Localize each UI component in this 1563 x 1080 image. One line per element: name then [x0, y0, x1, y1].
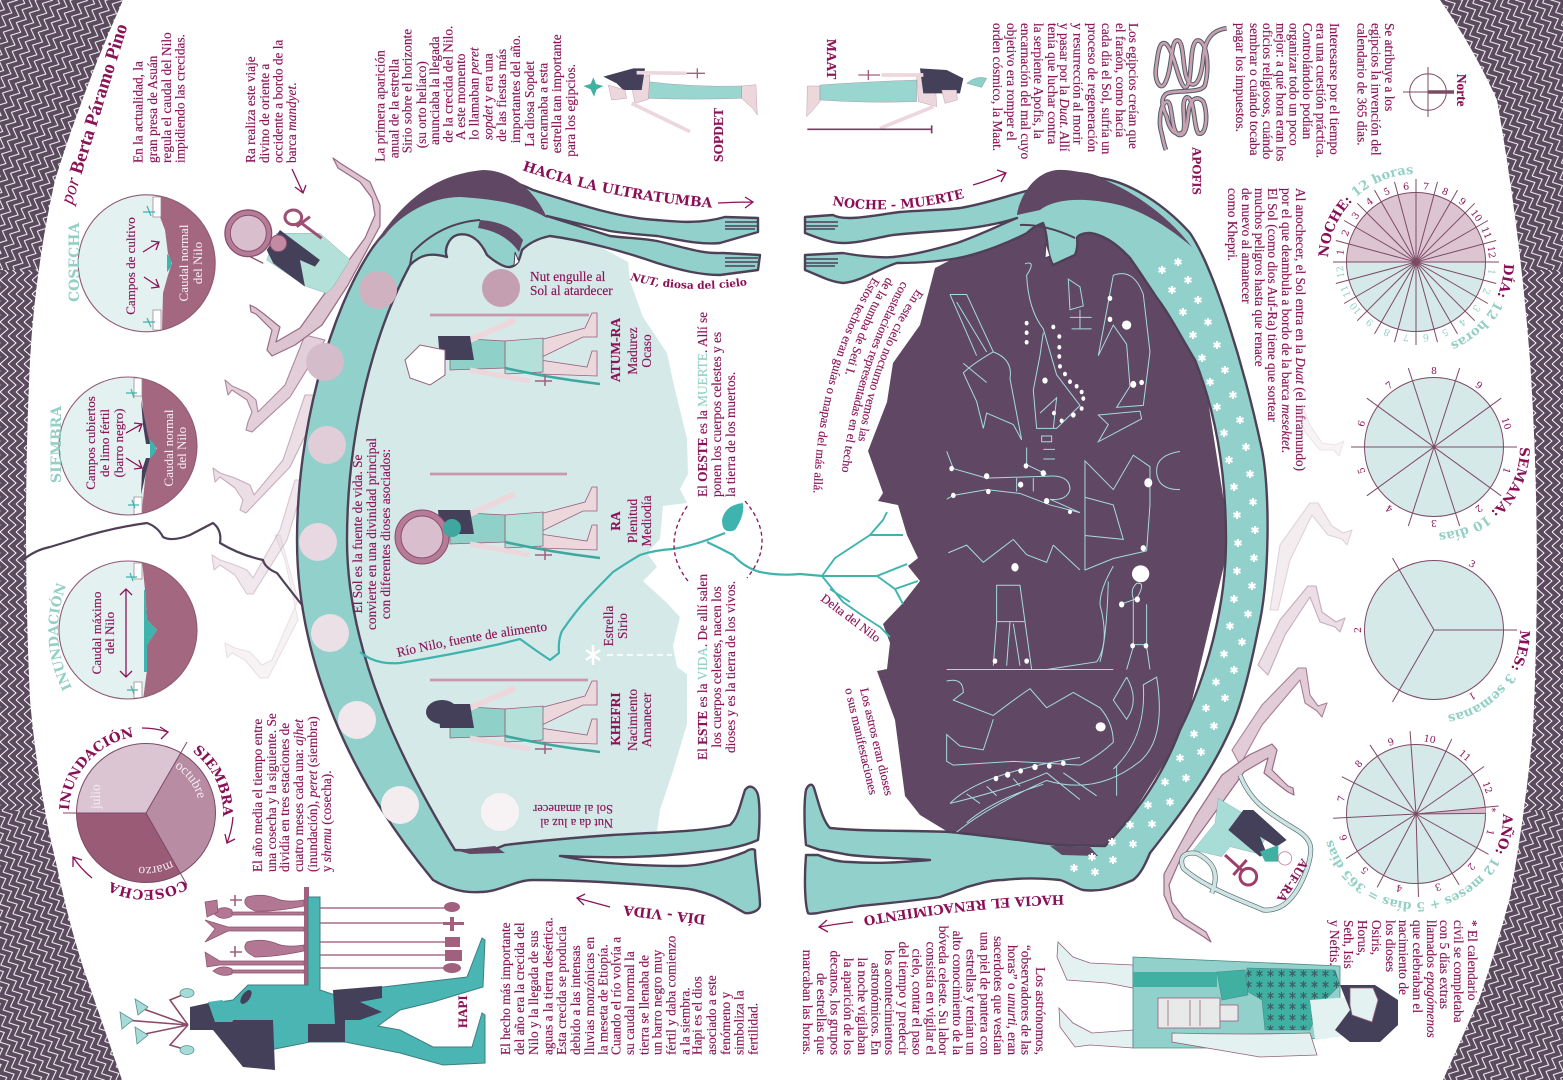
- chart: clock mes: MES: 3 semanas: [1448, 630, 1530, 722]
- chart: clock noche y día: 2: [1480, 286, 1492, 296]
- text: El Sol fuente de vida: El Sol es la fuente de vida. Se: [350, 455, 365, 613]
- label: Estrella Sirio: Sirio: [615, 613, 630, 639]
- line: horizon river: [23, 523, 302, 605]
- chart: clock noche y día: 5: [1382, 186, 1392, 198]
- text: estrella Sirio: (su orto helíaco): [414, 61, 429, 148]
- chart: clock noche y día: 1: [1335, 248, 1347, 256]
- chart: clock año: *: [1486, 807, 1497, 813]
- figure: Auf-Ra on the barque: [1182, 775, 1311, 910]
- chart: clock año: 1: [1483, 828, 1495, 837]
- text: invención del calendario: calendario de 365 días.: [1354, 23, 1370, 146]
- labels: gods: Ocaso: [639, 334, 654, 368]
- text: cielo nocturno: de la tumba de Seti I.: [845, 278, 893, 374]
- chart: clock noche y día: 6: [1422, 331, 1430, 343]
- text: cielo nocturno: Estos techos eran guías o mapas del más allá.: [813, 277, 880, 492]
- byline: por Berta Páramo Pino: [64, 25, 127, 208]
- text: astrónomos: sacerdotes que vestían: [991, 936, 1006, 1055]
- boats: right solar barques: [1164, 405, 1352, 942]
- figure: reclining woman: [1057, 942, 1398, 1057]
- labels: gods: ATUM-RA: [608, 318, 623, 382]
- chart: clock semana: 6: [1356, 419, 1368, 428]
- text: astrónomos: de estrellas que: [814, 973, 829, 1055]
- left text: Asuán: gran presa de Asuán: [145, 55, 160, 163]
- text: año y cosecha: cuatro meses cada una: ajhet: [291, 719, 306, 872]
- text: epagómenos: llamados epagómenos: [1424, 920, 1439, 1038]
- text: astrónomos: la aparición de los: [841, 958, 856, 1055]
- figure: Nut left (day): [297, 170, 760, 913]
- chart: clock año: 9: [1387, 737, 1396, 749]
- chart: clock noche y día: 9: [1364, 316, 1376, 328]
- arrows: dashed west and east: [674, 501, 762, 581]
- text: crecida: Cuando el río volvía a: [609, 937, 624, 1055]
- text: epagómenos: los dioses: [1383, 920, 1398, 972]
- text: crecida: del año era la crecida del: [512, 922, 527, 1055]
- chart: clock noche y día: 3: [1350, 210, 1362, 222]
- label: Nut da a luz: Nut da a luz al: [540, 816, 613, 830]
- text: interés práctico: pagar los impuestos.: [1233, 23, 1248, 132]
- text: OESTE: la tierra de los muertos.: [723, 372, 738, 497]
- panel: cosecha circle: Caudal normal: [176, 224, 191, 301]
- text: Ra mandyet: occidente a bordo de la: [270, 40, 286, 163]
- text: OESTE: ponen los cuerpos celestes y es: [709, 332, 724, 497]
- label: Nut da a luz: Sol al amanecer: [532, 802, 613, 816]
- figure: Atum-Ra: [405, 313, 600, 386]
- text: estrella Sirio: para los egipcios.: [563, 64, 578, 157]
- text: Los egipcios creían: la serpiente Apofis, la: [1031, 23, 1046, 139]
- panel: cosecha circle: Campos de cultivo: [123, 217, 138, 315]
- text: crecida: Nilo y la llegada de sus: [526, 931, 541, 1055]
- text: Los astros eran dioses: Los astros eran dioses: [860, 687, 891, 796]
- chart: clock noche y día: DÍA: 12 horas: [1451, 264, 1515, 349]
- chart: clock noche y día: 11: [1478, 225, 1493, 241]
- label: cosecha teal: COSECHA: [67, 222, 83, 302]
- text: El Sol fuente de vida: convierte en una divinidad principal: [364, 438, 379, 630]
- panel: siembra circle: de limo fértil: [97, 409, 112, 477]
- chart: clock noche y día: 12: [1335, 265, 1347, 279]
- panel: siembra circle: (barro negro): [111, 409, 126, 477]
- text: crecida: su caudal normal la: [622, 951, 637, 1055]
- chart: clock noche y día: 4: [1456, 316, 1468, 328]
- text: ESTE: los cuerpos celestes, nacen los: [709, 586, 724, 748]
- text: interés práctico: era una cuestión práctica.: [1314, 23, 1328, 158]
- text: epagómenos: civil se completaba: [1451, 920, 1466, 1023]
- label: Sopdet: SOPDET: [711, 108, 726, 162]
- boats: left solar barques: [212, 158, 380, 678]
- text: anochecer: como Khepri.: [1225, 188, 1240, 261]
- text: crecida: fertilidad.: [745, 1003, 760, 1055]
- chart: clock año: 3: [1433, 880, 1442, 892]
- Nile river: [360, 512, 918, 663]
- text: Los astros eran dioses: o sus manifestaciones: [845, 688, 875, 795]
- chart: clock semana: 5: [1356, 466, 1368, 475]
- chart: clock noche y día: 3: [1470, 302, 1482, 314]
- chart: seasons pie: julio: [88, 784, 103, 810]
- panel: dark night sky: [868, 220, 1230, 850]
- label: Hapi: HAPI: [455, 996, 470, 1028]
- left text: Asuán: impidiendo las crecidas.: [172, 34, 188, 163]
- chart: clock noche y día: NOCHE: 12 horas: [1318, 167, 1413, 257]
- text: año y cosecha: y shemu (cosecha).: [319, 770, 334, 872]
- text: astrónomos: una piel de pantera con: [978, 932, 993, 1055]
- text: crecida: la meseta de Etiopía.: [595, 944, 610, 1055]
- text: epagómenos: Horus,: [1355, 920, 1370, 956]
- label: Río Nilo: Río Nilo, fuente de alimento: [396, 624, 547, 657]
- figure: Ra on the barque: [225, 210, 350, 293]
- chart: seasons pie: INUNDACIÓN: [59, 727, 132, 810]
- chart: clock noche y día: 11: [1339, 283, 1354, 299]
- panel: siembra circle: Campos cubiertos: [83, 396, 98, 490]
- text: astrónomos: “observadores de las: [1019, 945, 1034, 1055]
- text: Los egipcios creían: objetivo era romper el: [1004, 23, 1019, 141]
- text: año y cosecha: El año media el tiempo entre: [250, 719, 265, 872]
- text: anochecer: Al anochecer, el Sol entra en la Duat (el inframundo): [1293, 188, 1308, 471]
- chart: clock noche y día: 5: [1440, 326, 1450, 338]
- icon: Sirio star: [586, 645, 672, 665]
- text: Ra mandyet: barca mandyet.: [284, 83, 299, 163]
- label: Nut diosa del cielo: NUT, diosa del cielo: [630, 272, 746, 289]
- chart: clock noche y día: 9: [1456, 196, 1468, 208]
- text: astrónomos: decanos, los grupos: [828, 950, 843, 1055]
- Nile lake: [722, 503, 743, 531]
- chart: clock semana: 9: [1473, 380, 1484, 392]
- text: Los egipcios creían: el faraón, como hacía: [1113, 23, 1128, 138]
- text: El Sol fuente de vida: con diferentes dioses asociados:: [378, 449, 393, 619]
- chart: clock semana: 1: [1500, 466, 1512, 475]
- text: crecida: aguas a la tierra desértica.: [540, 917, 556, 1055]
- panel: light day land: [335, 222, 688, 860]
- panel: inundación circle: Caudal máximo: [89, 592, 104, 674]
- label: Auf-Ra: AUF-RA: [1274, 856, 1311, 904]
- label: Norte: Norte: [1454, 74, 1469, 107]
- text: invención del calendario: egipcios la invención del: [1368, 23, 1384, 156]
- text: interés práctico: Controlándolo podían: [1300, 23, 1315, 140]
- text: OESTE: El OESTE es la MUERTE. Allí se: [695, 312, 710, 497]
- chart: seasons pie: COSECHA: [110, 882, 187, 900]
- chart: clock noche y día: 12: [1485, 245, 1497, 259]
- figure: Maat: [807, 68, 987, 133]
- chart: clock mes: 2: [1353, 627, 1364, 633]
- chart: seasons pie: octubre: [176, 763, 204, 798]
- labels: gods: RA: [608, 511, 623, 531]
- chart: seasons pie: [59, 726, 236, 900]
- text: estrella Sirio: lo llamaban peret: [466, 47, 481, 140]
- labels: gods: Madurez: [625, 327, 640, 375]
- text: Los egipcios creían: cada día el Sol, sufría un: [1099, 23, 1114, 155]
- chart: clock noche y día: 7: [1422, 181, 1430, 193]
- text: epagómenos: * El calendario: [1465, 920, 1480, 1001]
- stars: night band: [1070, 258, 1258, 876]
- label: inundación teal: INUNDACIÓN: [48, 582, 72, 692]
- text: estrella Sirio: sopdet y era una: [481, 53, 496, 140]
- text: Los egipcios creían: encarnación del mal cuyo: [1018, 23, 1033, 160]
- label: Nut engulle: Sol al atardecer: [530, 283, 613, 298]
- text: astrónomos: alto conocimiento de la: [950, 931, 965, 1055]
- text: Ra mandyet: divino de oriente a: [257, 64, 272, 163]
- text: crecida: un barro negro muy: [650, 949, 665, 1055]
- text: Los egipcios creían: y resurrección al morir: [1070, 23, 1086, 145]
- text: estrella Sirio: estrella tan importante: [549, 34, 564, 153]
- heading: noche muerte: NOCHE - MUERTE: [832, 188, 964, 210]
- text: cielo nocturno: [813, 277, 924, 492]
- chart: clock noche y día: 10: [1348, 300, 1364, 316]
- text: astrónomos: marcaban las horas.: [800, 950, 815, 1055]
- text: interés práctico: organizar todo un poco: [1286, 23, 1302, 146]
- text: interés práctico: mejor: a qué hora eran los: [1274, 23, 1288, 161]
- text: epagómenos: nacimiento de: [1396, 920, 1411, 995]
- chart: clock año: 4: [1395, 882, 1403, 894]
- text: epagómenos: Seth, Isis: [1341, 920, 1356, 969]
- text: astrónomos: Los astrónomos,: [1033, 967, 1048, 1055]
- text: Los egipcios creían: Los egipcios creían que: [1126, 23, 1141, 149]
- labels: gods: KHEFRI: [608, 692, 623, 746]
- chart: clock noche y día: 8: [1440, 186, 1450, 198]
- left text: Asuán: En la actualidad, la: [130, 61, 146, 163]
- text: epagómenos: con 5 días extras: [1437, 920, 1452, 1009]
- chart: clock noche y día: [1318, 167, 1515, 349]
- text: crecida: Hapi es el dios: [690, 976, 705, 1055]
- chart: clock año: 11: [1456, 748, 1473, 764]
- text: anochecer: muchos peligros hasta que renace: [1252, 188, 1267, 367]
- chart: clock semana: 2: [1473, 502, 1484, 514]
- label: Nut engulle: Nut engulle al: [530, 269, 606, 284]
- text: crecida: lluvias monzónicas en: [582, 936, 597, 1055]
- chart: clock noche y día: 7: [1402, 331, 1410, 343]
- suns: on Nut's body: [299, 269, 520, 831]
- text: crecida: fenómeno y: [718, 992, 733, 1055]
- text: anochecer: de nuevo al amanecer: [1239, 188, 1254, 304]
- text: anochecer: El Sol (como dios Auf-Ra) tiene que sortear: [1265, 188, 1280, 422]
- figure: Khefri: [426, 680, 600, 754]
- chart: clock mes: 3: [1466, 558, 1477, 571]
- text: crecida: tierra se llenaba de: [636, 955, 651, 1055]
- heading: hacia la ultratumba: HACIA LA ULTRATUMBA: [522, 160, 712, 208]
- text: estrella Sirio: A este momento: [453, 53, 468, 140]
- text: interés práctico: sembrar o cuándo tocaba: [1247, 23, 1262, 156]
- text: Los egipcios creían: tenía que luchar contra: [1045, 23, 1060, 145]
- chart: clock semana: 7: [1384, 380, 1395, 392]
- text: crecida: Esta crecida se producía: [554, 926, 569, 1055]
- figure: Nut right (night): [804, 170, 1268, 914]
- icon: Apofis snake: [1156, 28, 1227, 150]
- panel: inundación circle: [59, 560, 205, 700]
- chart: clock año: 10: [1423, 733, 1437, 746]
- text: cielo nocturno: En este cielo nocturno vemos las: [858, 289, 924, 442]
- constellations: Seti I ceiling: [947, 263, 1180, 832]
- text: crecida: fértil y daba comienzo: [664, 935, 679, 1055]
- text: astrónomos: la noche vigilaban: [855, 958, 870, 1055]
- chart: clock semana: 8: [1431, 366, 1437, 377]
- text: estrella Sirio: Sirio sobre el horizonte: [400, 29, 415, 153]
- chart: clock año: 2: [1465, 860, 1477, 872]
- chart: clock año: 5: [1359, 864, 1371, 876]
- text: interés práctico: oficios religiosos, cuándo: [1260, 23, 1275, 160]
- heading: hacia el renacimiento: HACIA EL RENACIMIENTO: [864, 895, 1064, 926]
- chart: clock noche y día: 10: [1468, 208, 1484, 224]
- chart: clock semana: SEMANA: 10 días: [1439, 448, 1530, 541]
- chart: clock noche y día: 4: [1364, 196, 1376, 208]
- text: Ra mandyet: Ra realiza este viaje: [243, 56, 258, 163]
- text: epagómenos: que celebraban el: [1410, 920, 1425, 1013]
- chart: clock año: 8: [1353, 758, 1365, 770]
- left text: Asuán: regula el caudal del Nilo: [159, 32, 174, 163]
- chart: clock mes: 1: [1466, 689, 1477, 702]
- text: ESTE: El ESTE es la VIDA. De allí salen: [695, 574, 710, 760]
- chart: seasons pie: marzo: [138, 861, 174, 874]
- text: astrónomos: del tiempo y predecir: [896, 942, 911, 1056]
- text: astrónomos: horas” o unurti , eran: [1005, 945, 1020, 1055]
- text: astrónomos: astronómicos. En: [869, 963, 884, 1055]
- text: crecida: El hecho más importante: [498, 922, 513, 1055]
- figure: Sopdet: [583, 68, 757, 132]
- labels: gods: Plenitud: [625, 498, 640, 543]
- label: Delta del Nilo: Delta del Nilo: [818, 591, 883, 645]
- icon: compass: [1403, 67, 1454, 117]
- arrow: renacimiento: [819, 920, 853, 932]
- arrow: noche: [973, 170, 1006, 185]
- panel: cosecha circle: [78, 190, 225, 332]
- text: interés práctico: Interesarse por el tiempo: [1327, 23, 1342, 155]
- text: Los egipcios creían: y pasar por la Duat . Allí: [1057, 23, 1072, 152]
- label: siembra teal: SIEMBRA: [49, 405, 65, 483]
- text: anochecer: por el que deambula a bordo de la barca mesektet .: [1279, 188, 1294, 453]
- chart: clock año: [1326, 731, 1514, 912]
- chart: seasons pie: SIEMBRA: [194, 746, 233, 816]
- chart: clock año: 7: [1336, 795, 1348, 803]
- chart: clock noche y día: 2: [1340, 228, 1352, 238]
- labels: gods: Mediodía: [639, 495, 654, 546]
- text: astrónomos: consistía en vigilar el: [924, 942, 939, 1055]
- panel: siembra circle: Caudal normal: [161, 409, 176, 486]
- arrow: ultratumba: [718, 197, 753, 208]
- text: estrella Sirio: de las fiestas más: [494, 49, 509, 142]
- labels: gods: Nacimiento: [625, 689, 640, 751]
- panel: siembra circle: [59, 375, 205, 520]
- text: estrella Sirio: de la crecida del Nilo.: [441, 26, 456, 143]
- chart: clock año: 12: [1480, 780, 1494, 795]
- chart: clock semana: [1351, 366, 1530, 541]
- figure: Hapi: [120, 887, 485, 1070]
- text: año y cosecha: una cosecha y la siguiente. Se: [264, 713, 279, 872]
- labels: gods: Amanecer: [639, 692, 654, 747]
- text: crecida: debido a las intensas: [568, 945, 583, 1055]
- label: Maat: MAAT: [824, 39, 839, 79]
- label: Estrella Sirio: Estrella: [601, 606, 616, 646]
- text: año y cosecha: (inundación), peret (siembra): [305, 716, 320, 872]
- text: astrónomos: cielo, contar el paso: [910, 949, 925, 1055]
- text: epagómenos: y Neftis.: [1327, 920, 1342, 966]
- panel: inundación circle: del Nilo: [102, 612, 117, 654]
- text: invención del calendario: Se atribuye a los: [1382, 23, 1397, 111]
- text: estrella Sirio: importantes del año.: [508, 35, 523, 143]
- text: ESTE: dioses y es la tierra de los vivos.: [723, 581, 738, 753]
- text: año y cosecha: dividía en tres estaciones de: [277, 723, 292, 872]
- text: astrónomos: los acontecimientos: [882, 950, 897, 1055]
- chart: clock semana: 3: [1431, 517, 1437, 528]
- label: Apofis: APOFIS: [1190, 147, 1204, 195]
- text: crecida: simboliza la: [731, 990, 746, 1055]
- text: crecida: asociado a este: [704, 975, 719, 1055]
- heading: día vida: DÍA - VIDA: [624, 906, 706, 926]
- text: estrella Sirio: La primera aparición: [372, 50, 387, 162]
- text: cielo nocturno: constelaciones representadas en el techo: [842, 282, 906, 472]
- text: astrónomos: bóveda celeste. Su labor: [936, 926, 951, 1056]
- chart: clock noche y día: 6: [1402, 181, 1410, 193]
- text: epagómenos: Osiris,: [1369, 920, 1384, 955]
- panel: cosecha circle: del Nilo: [190, 242, 205, 284]
- text: estrella Sirio: La diosa Sopdet: [522, 61, 537, 147]
- chart: clock semana: 4: [1384, 502, 1395, 514]
- panel: siembra circle: del Nilo: [174, 427, 189, 469]
- text: crecida: a la siembra.: [677, 987, 692, 1055]
- chart: clock semana: 10: [1499, 416, 1513, 431]
- text: estrella Sirio: anual de la estrella: [386, 59, 401, 158]
- arrow: to Ra: [292, 169, 306, 193]
- labels: gods: [608, 318, 654, 751]
- chart: clock mes: [1353, 558, 1530, 722]
- text: Los egipcios creían: orden cósmico, la Maat.: [990, 23, 1005, 151]
- chart: clock año: 6: [1338, 833, 1350, 842]
- text: estrella Sirio: encarnaba a esta: [535, 63, 550, 150]
- chart: clock año: AÑO: 12 meses + 5 días = 365 días: [1326, 814, 1514, 912]
- text: Los egipcios creían: proceso de regeneración: [1085, 23, 1100, 153]
- text: astrónomos: estrellas y tenían un: [964, 949, 979, 1055]
- chart: clock noche y día: 8: [1382, 326, 1392, 338]
- chart: clock noche y día: 1: [1485, 268, 1497, 276]
- text: estrella Sirio: anunciaba la llegada: [427, 36, 442, 145]
- arrow: día: [577, 894, 610, 907]
- figure: Ra: [395, 474, 600, 564]
